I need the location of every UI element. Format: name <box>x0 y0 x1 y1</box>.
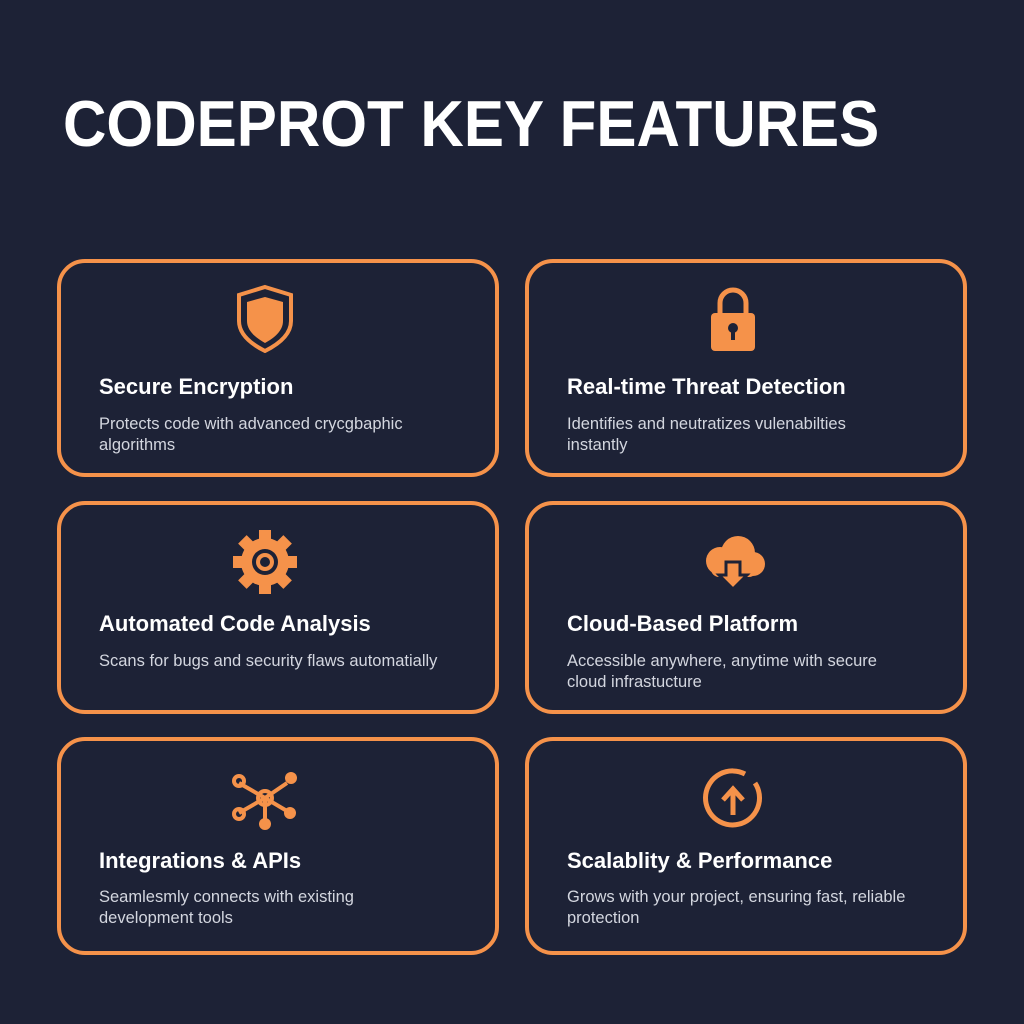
text: Identifies and neutratizes vulenabilties instantly <box>567 415 846 454</box>
icon: network <box>232 772 297 830</box>
panel: code analysis <box>57 501 499 714</box>
heading: Automated Code Analysis <box>99 611 371 636</box>
title: CODEPROT KEY FEATURES <box>63 87 879 160</box>
icon: gear <box>233 530 297 594</box>
icon: circular arrow <box>703 768 762 828</box>
heading: Cloud-Based Platform <box>567 611 798 636</box>
icon: lock <box>711 288 755 351</box>
text: Protects code with advanced crycgbaphic algorithms <box>99 415 403 454</box>
text: Scans for bugs and security flaws automatially <box>99 652 437 670</box>
heading: Secure Encryption <box>99 374 293 399</box>
panel: secure encryption <box>57 259 499 477</box>
text: Accessible anywhere, anytime with secure cloud infrastucture <box>567 652 877 691</box>
panel: cloud platform <box>525 501 967 714</box>
icon: shield <box>237 284 293 353</box>
icon: cloud <box>706 536 765 587</box>
panel: scalability <box>525 737 967 955</box>
panel: integrations <box>57 737 499 955</box>
heading: Integrations & APIs <box>99 848 301 873</box>
text: Seamlesmly connects with existing development tools <box>99 888 354 927</box>
heading: Real-time Threat Detection <box>567 374 846 399</box>
text: Grows with your project, ensuring fast, reliable protection <box>567 888 905 927</box>
heading: Scalablity & Performance <box>567 848 832 873</box>
panel: threat detection <box>525 259 967 477</box>
